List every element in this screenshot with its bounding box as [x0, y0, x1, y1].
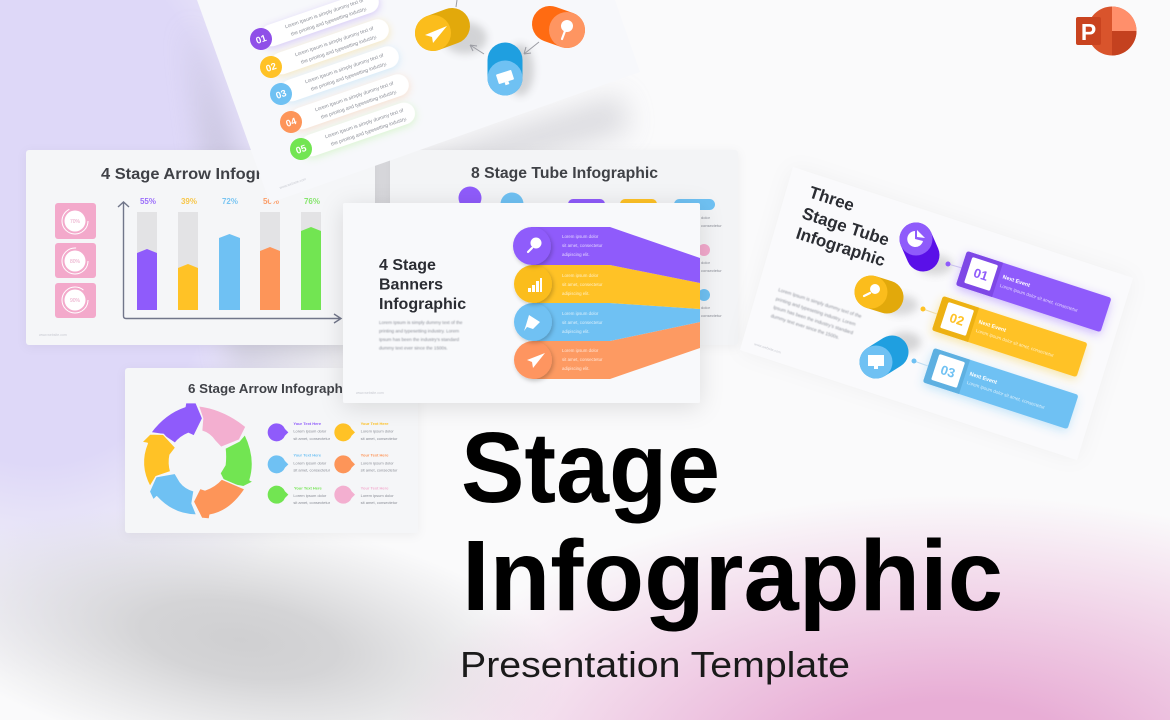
icon: PowerPoint logo — [1076, 6, 1136, 56]
heading: 4 stage banners — [379, 257, 466, 313]
legend items: Lorem ipsum dolor — [293, 493, 327, 498]
pill 02: Lorem Ipsum is simply dummy text of — [294, 26, 375, 58]
circular arrow ring — [142, 403, 253, 519]
body paragraph — [379, 320, 463, 350]
tube: purple pie — [900, 222, 953, 275]
tube: yellow search — [854, 276, 918, 315]
legend items: Lorem ipsum dolor — [293, 460, 327, 465]
banner: yellow — [514, 265, 700, 309]
body paragraph: dummy text ever since the 1500s. — [770, 313, 840, 341]
card 03: Next Event — [969, 371, 998, 386]
pill 01 — [247, 0, 382, 53]
banner: purple: adipiscing elit. — [562, 252, 590, 257]
heading: three stage tube: Three — [807, 183, 857, 215]
body paragraph: printing and typesetting industry. Lorem — [775, 296, 856, 328]
pill 02: 02 — [265, 61, 278, 75]
legend items — [268, 421, 398, 505]
banner: blue: sit amet, consectetur — [562, 320, 603, 325]
panel: 8 stage tube infographic slide — [390, 150, 738, 345]
tube: blue monitor — [488, 44, 534, 96]
banner: orange: adipiscing elit. — [562, 366, 590, 371]
tube: blue monitor — [860, 332, 921, 378]
tube icons — [458, 186, 715, 301]
card 01: 01 — [972, 265, 990, 284]
pill 04: the printing and typesetting industry. — [320, 89, 398, 121]
panel: 6 stage arrow infographic slide — [125, 368, 418, 533]
title: Infographic — [462, 520, 1003, 632]
title — [461, 412, 1003, 632]
card 02 — [932, 296, 1088, 377]
bar chart: 76% — [304, 197, 320, 206]
banner: purple — [513, 227, 700, 283]
pill 05 — [287, 100, 418, 163]
title: Stage — [461, 412, 720, 524]
banner: yellow: Lorem ipsum dolor — [562, 273, 599, 278]
heading: three stage tube: Stage Tube — [800, 204, 892, 250]
banner: yellow: sit amet, consectetur — [562, 282, 603, 287]
card 03: Lorem ipsum dolor sit amet, consectetur — [966, 380, 1046, 410]
connector dots — [912, 262, 962, 366]
legend items: Your Text Here — [293, 421, 322, 426]
card 03 — [923, 348, 1079, 429]
legend items: Your Text Here — [361, 453, 389, 458]
heading: three stage tube — [794, 183, 892, 270]
pink donut tiles: 70% — [70, 219, 81, 225]
pink donut tiles — [55, 203, 96, 318]
side labels: dolor — [701, 215, 711, 220]
side labels: consectetur — [701, 313, 722, 318]
legend items: Lorem ipsum dolor — [361, 429, 394, 434]
heading: 6 stage arrow: 6 Stage Arrow Infographic — [188, 381, 354, 396]
legend items: Lorem ipsum dolor — [361, 460, 394, 465]
pill 05: the printing and typesetting industry. — [330, 116, 408, 148]
legend items: Your Text Here — [361, 485, 389, 490]
bar chart: 39% — [181, 197, 197, 206]
footer url: www.website.com — [754, 342, 781, 355]
legend items: Your Text Here — [293, 453, 322, 458]
body paragraph: Ipsum has been the industry's standard — [772, 305, 854, 336]
bar chart: 56% — [263, 197, 279, 206]
legend items: sit amet, consectetur — [293, 467, 331, 472]
bar chart: 55% — [140, 197, 156, 206]
panel: 4 stage banners main slide — [343, 203, 700, 403]
card 02: Next Event — [978, 319, 1007, 334]
body paragraph: dummy text ever since the 1500s. — [379, 346, 448, 350]
side labels: consectetur — [701, 268, 722, 273]
icon: PowerPoint logo: P — [1081, 19, 1096, 45]
card 02: 02 — [948, 310, 966, 329]
banner: orange — [514, 322, 700, 379]
chart axes — [118, 202, 341, 323]
panel: tilted numbered list and tube cycle slide — [197, 0, 640, 203]
footer url: www.website.com — [279, 177, 307, 190]
pill 04: Lorem Ipsum is simply dummy text of — [314, 81, 395, 113]
pill 05: Lorem Ipsum is simply dummy text of — [324, 108, 405, 140]
footer url: www.website.com — [39, 333, 67, 337]
subtitle: Presentation Template — [460, 644, 850, 685]
side labels — [701, 215, 722, 318]
side labels: dolor — [701, 305, 711, 310]
legend items: sit amet, consectetur — [293, 500, 331, 505]
banner: orange: sit amet, consectetur — [562, 357, 603, 362]
banner: purple: sit amet, consectetur — [562, 243, 603, 248]
body paragraph: Ipsum has been the industry's standard — [379, 337, 459, 342]
pill 02 — [257, 16, 392, 81]
cycle arrows — [456, 0, 539, 54]
body paragraph — [770, 287, 862, 341]
banner: blue: adipiscing elit. — [562, 329, 590, 334]
banner: orange: Lorem ipsum dolor — [562, 348, 599, 353]
pill 02: the printing and typesetting industry. — [300, 34, 378, 66]
pill 04 — [277, 71, 412, 136]
banner: yellow: adipiscing elit. — [562, 291, 590, 296]
heading: three stage tube: Infographic — [794, 224, 888, 270]
body paragraph: printing and typesetting industry. Lorem — [379, 328, 459, 334]
pill 01: 01 — [255, 33, 269, 47]
card 01: Lorem ipsum dolor sit amet, consectetur — [999, 283, 1079, 313]
legend items: sit amet, consectetur — [293, 436, 331, 441]
legend items: sit amet, consectetur — [361, 500, 398, 505]
pill 03 — [267, 43, 402, 108]
side labels: consectetur — [701, 223, 722, 228]
side labels: dolor — [701, 260, 711, 265]
card 01 — [956, 251, 1112, 332]
banner: blue — [514, 303, 700, 341]
pill 03: Lorem Ipsum is simply dummy text of — [304, 53, 385, 85]
legend items: sit amet, consectetur — [361, 436, 398, 441]
body paragraph: Lorem Ipsum is simply dummy text of the — [777, 287, 862, 320]
bar chart — [137, 197, 321, 310]
legend items: Lorem ipsum dolor — [361, 493, 394, 498]
pill 01: the printing and typesetting industry. — [290, 6, 368, 38]
heading: 4 stage arrow: 4 Stage Arrow Infographic — [101, 166, 305, 183]
pink donut tiles: 90% — [70, 298, 81, 304]
bar chart: 72% — [222, 197, 238, 206]
legend items: Lorem ipsum dolor — [293, 429, 327, 434]
legend items: sit amet, consectetur — [361, 467, 398, 472]
pill 04: 04 — [285, 116, 299, 130]
legend items: Your Text Here — [361, 421, 389, 426]
banner: purple: Lorem ipsum dolor — [562, 234, 599, 239]
body paragraph: Lorem Ipsum is simply dummy text of the — [379, 320, 463, 325]
heading: 4 stage banners: Infographic — [379, 296, 466, 313]
tube: orange search — [549, 12, 585, 48]
panel: 4 stage arrow infographic slide — [26, 150, 375, 345]
card 02: Lorem ipsum dolor sit amet, consectetur — [975, 328, 1055, 358]
pill 05: 05 — [295, 143, 309, 157]
panel: three stage tube tilted slide — [740, 167, 1133, 460]
tube: yellow plane — [415, 15, 487, 54]
banner: blue: Lorem ipsum dolor — [562, 311, 599, 316]
card 03: 03 — [939, 362, 957, 381]
heading: 4 stage banners: Banners — [379, 276, 443, 294]
legend items: Your Text Here — [294, 485, 323, 490]
pill 03: 03 — [275, 88, 288, 102]
card 01: Next Event — [1002, 274, 1031, 289]
heading: 4 stage banners: 4 Stage — [379, 257, 436, 274]
heading: 8 stage tube: 8 Stage Tube Infographic — [471, 165, 658, 182]
pill 03: the printing and typesetting industry. — [310, 61, 388, 93]
pink donut tiles: 80% — [70, 259, 81, 265]
footer url: www.website.com — [356, 391, 384, 395]
